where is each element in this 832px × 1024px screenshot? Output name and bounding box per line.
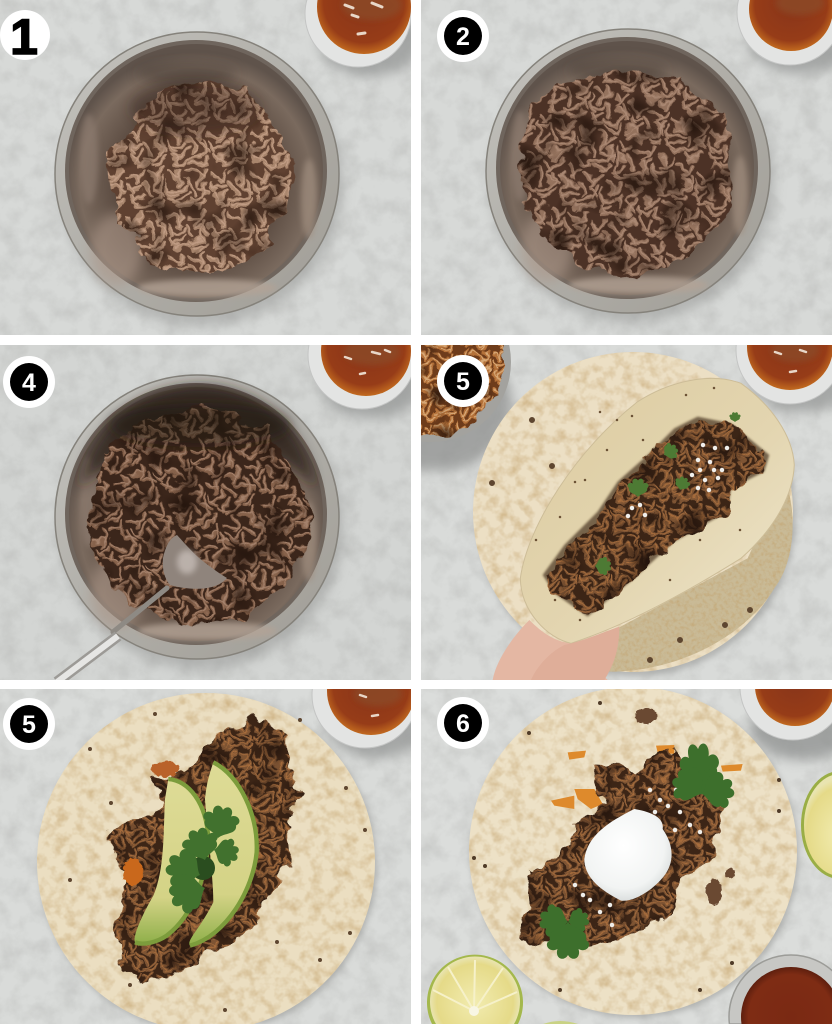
sauce smear [123, 858, 143, 886]
salsa dish [736, 345, 832, 418]
badge: step 5 [3, 698, 55, 750]
mixing bowl [486, 29, 774, 323]
salsa dish [308, 345, 411, 424]
countertop [421, 689, 832, 1024]
small lime at bottom edge [543, 1021, 578, 1024]
badge: step 5: 5 [456, 368, 470, 396]
mixing bowl [55, 375, 343, 669]
panel: step 6 finished tortilla with sour cream [421, 634, 832, 1024]
orange sauce bits [551, 745, 743, 809]
countertop [0, 345, 411, 680]
folded tortilla [520, 378, 794, 643]
panel: step 5 tortilla with avocado [0, 689, 411, 1024]
flat tortilla base [473, 352, 793, 672]
cilantro bits [595, 412, 741, 575]
salsa dish [305, 0, 422, 76]
salsa dish [312, 642, 430, 758]
spoon [57, 535, 227, 682]
panel: step 2 seasoned beef in bowl [421, 0, 832, 335]
lime wedge right [801, 771, 832, 879]
meat [103, 717, 302, 986]
badge: step 1 [0, 10, 50, 60]
countertop [421, 345, 832, 680]
tortilla [471, 690, 799, 1018]
crumbled cheese [575, 790, 700, 925]
salsa bowl bottom-right [729, 955, 832, 1024]
tortilla specks [474, 703, 779, 990]
tortilla shadow [476, 356, 796, 676]
cilantro bottom [538, 903, 591, 959]
tortilla specks [492, 420, 750, 660]
meat filling [546, 420, 768, 615]
sauce bit [151, 761, 179, 777]
countertop [421, 0, 832, 335]
sour cream [584, 809, 672, 901]
shredded beef [108, 82, 293, 275]
badge: step 4: 4 [22, 369, 36, 397]
tortilla underside [609, 478, 793, 672]
tortilla [39, 696, 377, 1024]
tortilla specks [70, 714, 365, 1010]
countertop [0, 689, 411, 1024]
cilantro top [665, 742, 737, 812]
shadow on upper meat [130, 82, 260, 134]
pocket shadow [543, 417, 769, 617]
avocado slice right [189, 762, 257, 946]
crumbled cheese [628, 445, 727, 516]
lime half bottom-left [427, 955, 523, 1024]
panel: step 1 shredded beef in bowl [0, 0, 422, 335]
badge: step 5: 5 [22, 711, 36, 739]
badge: step 5 [437, 355, 489, 407]
panel: step 5 folding the filled tortilla [421, 345, 832, 680]
panel: step 4 beef stirred with sauce [0, 345, 411, 680]
mixing bowl [55, 32, 343, 326]
shadow on upper meat [110, 403, 290, 447]
side bowl of filling [421, 345, 518, 477]
countertop [0, 0, 411, 335]
cilantro [161, 803, 242, 917]
salsa dish [740, 634, 832, 760]
badge: step 1: 1 [10, 9, 38, 65]
avocado slice left [135, 779, 208, 944]
badge: step 2 [437, 10, 489, 62]
meat [518, 749, 728, 946]
salsa dish [737, 0, 832, 74]
hand [493, 620, 608, 680]
tortilla speckle [536, 388, 740, 620]
sauced beef [87, 405, 312, 623]
loose meat pieces [635, 708, 735, 905]
badge: step 4 [3, 356, 55, 408]
badge: step 6: 6 [456, 710, 470, 738]
shredded beef [520, 70, 735, 277]
dark bowl interior shadow [80, 385, 315, 490]
badge: step 2: 2 [456, 23, 470, 51]
badge: step 6 [437, 697, 489, 749]
thumb [531, 627, 619, 680]
